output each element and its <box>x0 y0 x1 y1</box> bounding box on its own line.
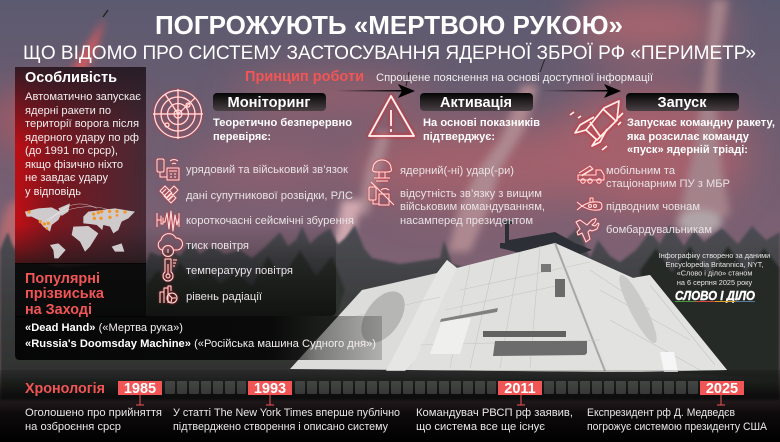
credits <box>659 251 770 287</box>
note: simplified explanation: Спрощене пояснення на основі доступної інформації <box>376 72 653 84</box>
event 2011 <box>416 381 573 433</box>
list: monitoring items <box>157 159 354 303</box>
step: activation: підтверджує: <box>423 131 495 143</box>
features text: Автоматично запускає <box>25 91 141 103</box>
list: monitoring items: короткочасні сейсмічні збурення <box>186 215 354 227</box>
event 1985: 1985 <box>124 381 156 397</box>
step: monitoring: Теоретично безперервно <box>213 117 352 129</box>
nicknames heading: на Заході <box>25 302 92 318</box>
step: launch: «пуск» ядерній тріаді: <box>627 144 748 156</box>
features heading: Особливість <box>25 70 117 86</box>
features text: ядерні ракети по <box>25 105 111 117</box>
list: launch items: стаціонарним ПУ з МБР <box>606 178 730 190</box>
icon: thermometer <box>163 259 177 281</box>
event 1985: на озброєння срср <box>25 421 121 433</box>
step: monitoring: Моніторинг <box>228 95 310 111</box>
step: monitoring: перевіряє: <box>213 131 271 143</box>
event 1993: 1993 <box>254 381 286 397</box>
shade behind monitoring list <box>146 225 336 316</box>
step: launch: Запускає командну ракету, <box>627 117 775 129</box>
event 2011: що система все ще існує <box>416 421 545 433</box>
list: activation items: відсутність зв’язку з вищим <box>400 188 542 200</box>
icon: launcher truck <box>578 166 604 183</box>
list: monitoring items: урядовий та військовий зв’язок <box>186 164 348 176</box>
missile at top left <box>103 10 108 17</box>
icon: satellite <box>160 186 178 203</box>
features text <box>25 91 141 198</box>
credits: Encyclopedia Britannica, NYT, <box>666 260 763 269</box>
logo: СЛОВО І ДІЛО <box>675 289 755 303</box>
features text: якщо фізично ніхто <box>25 159 123 171</box>
icon: no signal <box>369 182 394 205</box>
features text: території ворога після <box>25 118 139 130</box>
event 2025 <box>587 381 768 433</box>
features text: (до 1991 по срср), <box>25 145 118 157</box>
event 1985: Оголошено про прийняття <box>25 407 162 419</box>
list: launch items: бомбардувальникам <box>606 224 712 236</box>
step: launch: Запуск <box>658 95 707 111</box>
event 2011: 2011 <box>504 381 536 397</box>
list: activation items: військовим командуванням, <box>400 201 545 213</box>
list: activation items: насамперед президентом <box>400 215 533 227</box>
nickname 1: «Dead Hand» («Мертва рука») <box>25 322 183 334</box>
arrow: monitoring to activation <box>335 84 415 98</box>
event 2025: Експрезидент рф Д. Медведєв <box>587 407 735 419</box>
icon: phone and signal <box>157 159 179 180</box>
icon: bomber <box>576 219 599 242</box>
nicknames heading: Популярні <box>25 271 100 287</box>
timeline <box>25 381 768 433</box>
icon: warning <box>369 96 414 136</box>
list: activation items <box>369 160 545 227</box>
credits: на 6 серпня 2025 року <box>677 278 752 287</box>
event 2025: погрожує системою президенту США <box>587 421 768 433</box>
step: monitoring <box>153 89 352 143</box>
features text: не завдає удару <box>25 172 108 184</box>
event 2025: 2025 <box>706 381 738 397</box>
icon: seismograph <box>157 211 179 231</box>
icon: mushroom cloud <box>372 160 392 181</box>
event 1993: У статті The New York Times вперше публічно <box>173 407 400 419</box>
list: launch items: мобільним та <box>606 165 676 177</box>
event 1993 <box>173 381 400 433</box>
features text: у відповідь <box>25 186 81 198</box>
icon: radiation <box>160 286 177 303</box>
step: activation: На основі показників <box>423 117 540 129</box>
list: monitoring items: рівень радіації <box>186 291 262 303</box>
list: monitoring items: тиск повітря <box>186 240 249 252</box>
icon: rocket <box>570 101 623 150</box>
list: launch items <box>576 165 730 242</box>
event 2011: Командувач РВСП рф заявив, <box>416 407 573 419</box>
step: launch <box>570 93 775 156</box>
world map with dots <box>25 203 135 258</box>
arrow: activation to launch <box>540 84 621 98</box>
nickname 2: «Russia's Doomsday Machine» («Російська машина Судного дня») <box>25 338 376 350</box>
radar pyramid building <box>290 220 727 372</box>
list: launch items: підводним човнам <box>606 201 700 213</box>
list: monitoring items: температуру повітря <box>186 265 293 277</box>
list: activation items: ядерний(-ні) удар(-ри) <box>400 165 514 177</box>
title: ПОГРОЖУЮТЬ «МЕРТВОЮ РУКОЮ» <box>155 10 623 40</box>
panel: features <box>15 67 146 264</box>
event 1993: підтверджено створення і описано систему <box>173 421 388 433</box>
step: activation <box>369 93 540 143</box>
nicknames heading: прізвиська <box>25 286 105 302</box>
credits: «Слово і діло» станом <box>677 268 752 278</box>
icon: submarine <box>577 198 602 210</box>
heading: how it works: Принцип роботи <box>245 69 364 85</box>
timeline ticks <box>165 381 698 394</box>
dark lower band <box>0 370 780 442</box>
event 1985 <box>25 381 162 433</box>
step: activation: Активація <box>440 95 512 111</box>
features text: ядерного удару по рф <box>25 132 139 144</box>
forest <box>0 225 780 400</box>
list: monitoring items: дані супутникової розвідки, РЛС <box>186 190 353 202</box>
icon: radar <box>153 89 203 139</box>
panel: nicknames <box>15 263 382 360</box>
subtitle: ЩО ВІДОМО ПРО СИСТЕМУ ЗАСТОСУВАННЯ ЯДЕРНОЇ ЗБРОЇ РФ «ПЕРИМЕТР» <box>23 43 756 64</box>
credits: Інфографіку створено за даними <box>659 251 770 260</box>
thin missile trails <box>406 56 546 86</box>
timeline heading: Хронологія <box>25 381 105 397</box>
icon: cloud pressure <box>158 234 183 256</box>
nicknames heading <box>25 271 105 318</box>
step: launch: яка розсилає команду <box>627 131 750 143</box>
